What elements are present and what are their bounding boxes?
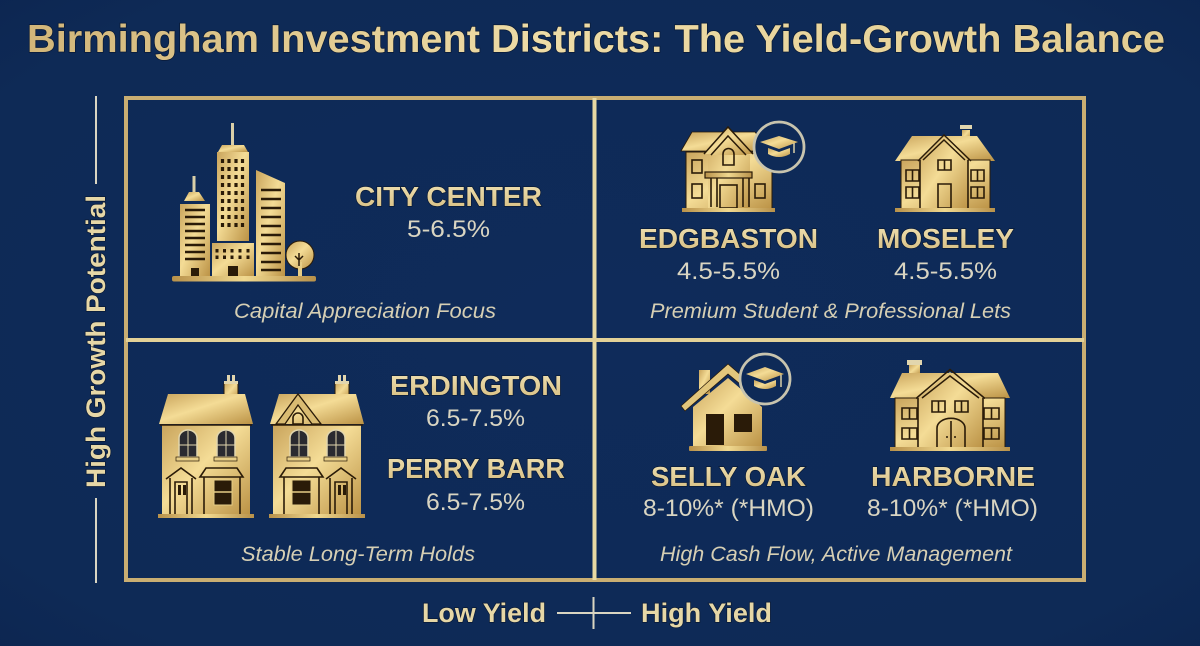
icon: terraced house one — [158, 375, 254, 518]
panel: Selly Oak and Harborne — [643, 354, 1038, 566]
title: Birmingham Investment Districts: The Yield-Growth Balance — [27, 18, 1165, 61]
district: Harborne: HARBORNE — [871, 461, 1035, 492]
district: Moseley: 4.5-5.5% — [894, 258, 997, 285]
panel: Edgbaston and Moseley — [639, 122, 1014, 323]
icon: Harborne house — [890, 360, 1010, 451]
x axis: Low Yield to High Yield — [422, 597, 772, 629]
panel: Erdington and Perry Barr — [158, 370, 565, 566]
district: Harborne: 8-10%* (*HMO) — [867, 495, 1038, 522]
icon: Moseley house — [895, 125, 995, 212]
caption: High Cash Flow, Active Management — [660, 543, 1013, 566]
district: Selly Oak: SELLY OAK — [651, 461, 806, 492]
caption: Stable Long-Term Holds — [241, 543, 476, 566]
district: Edgbaston — [639, 223, 818, 285]
icon: city skyline — [172, 123, 316, 282]
caption: Premium Student & Professional Lets — [650, 300, 1012, 323]
icon: Selly Oak house with graduation cap — [681, 354, 790, 451]
quadrant frame — [126, 98, 1084, 580]
y axis: High Growth Potential: High Growth Potential — [81, 195, 111, 488]
x axis: Low Yield to High Yield: High Yield — [641, 598, 772, 628]
district: Erdington — [390, 370, 562, 432]
district: Edgbaston: 4.5-5.5% — [677, 258, 780, 285]
x axis: Low Yield to High Yield: Low Yield — [422, 598, 546, 628]
district: Selly Oak — [643, 461, 814, 522]
district: Erdington: ERDINGTON — [390, 370, 562, 401]
district: Moseley — [877, 223, 1014, 285]
district: Perry Barr: PERRY BARR — [387, 453, 565, 484]
district: Erdington: 6.5-7.5% — [426, 405, 525, 432]
district: Edgbaston: EDGBASTON — [639, 223, 818, 254]
panel: City Center — [172, 123, 542, 323]
district: Selly Oak: 8-10%* (*HMO) — [643, 495, 814, 522]
district: Moseley: MOSELEY — [877, 223, 1014, 254]
district: City Center: CITY CENTER — [355, 181, 542, 212]
district: Perry Barr: 6.5-7.5% — [426, 489, 525, 516]
district: City Center: 5-6.5% — [407, 216, 490, 243]
district: Harborne — [867, 461, 1038, 522]
caption: Capital Appreciation Focus — [234, 300, 497, 323]
district: City Center — [355, 181, 542, 243]
icon: terraced house two — [269, 375, 365, 518]
district: Perry Barr — [387, 453, 565, 516]
icon: Edgbaston house with graduation cap — [681, 122, 804, 212]
